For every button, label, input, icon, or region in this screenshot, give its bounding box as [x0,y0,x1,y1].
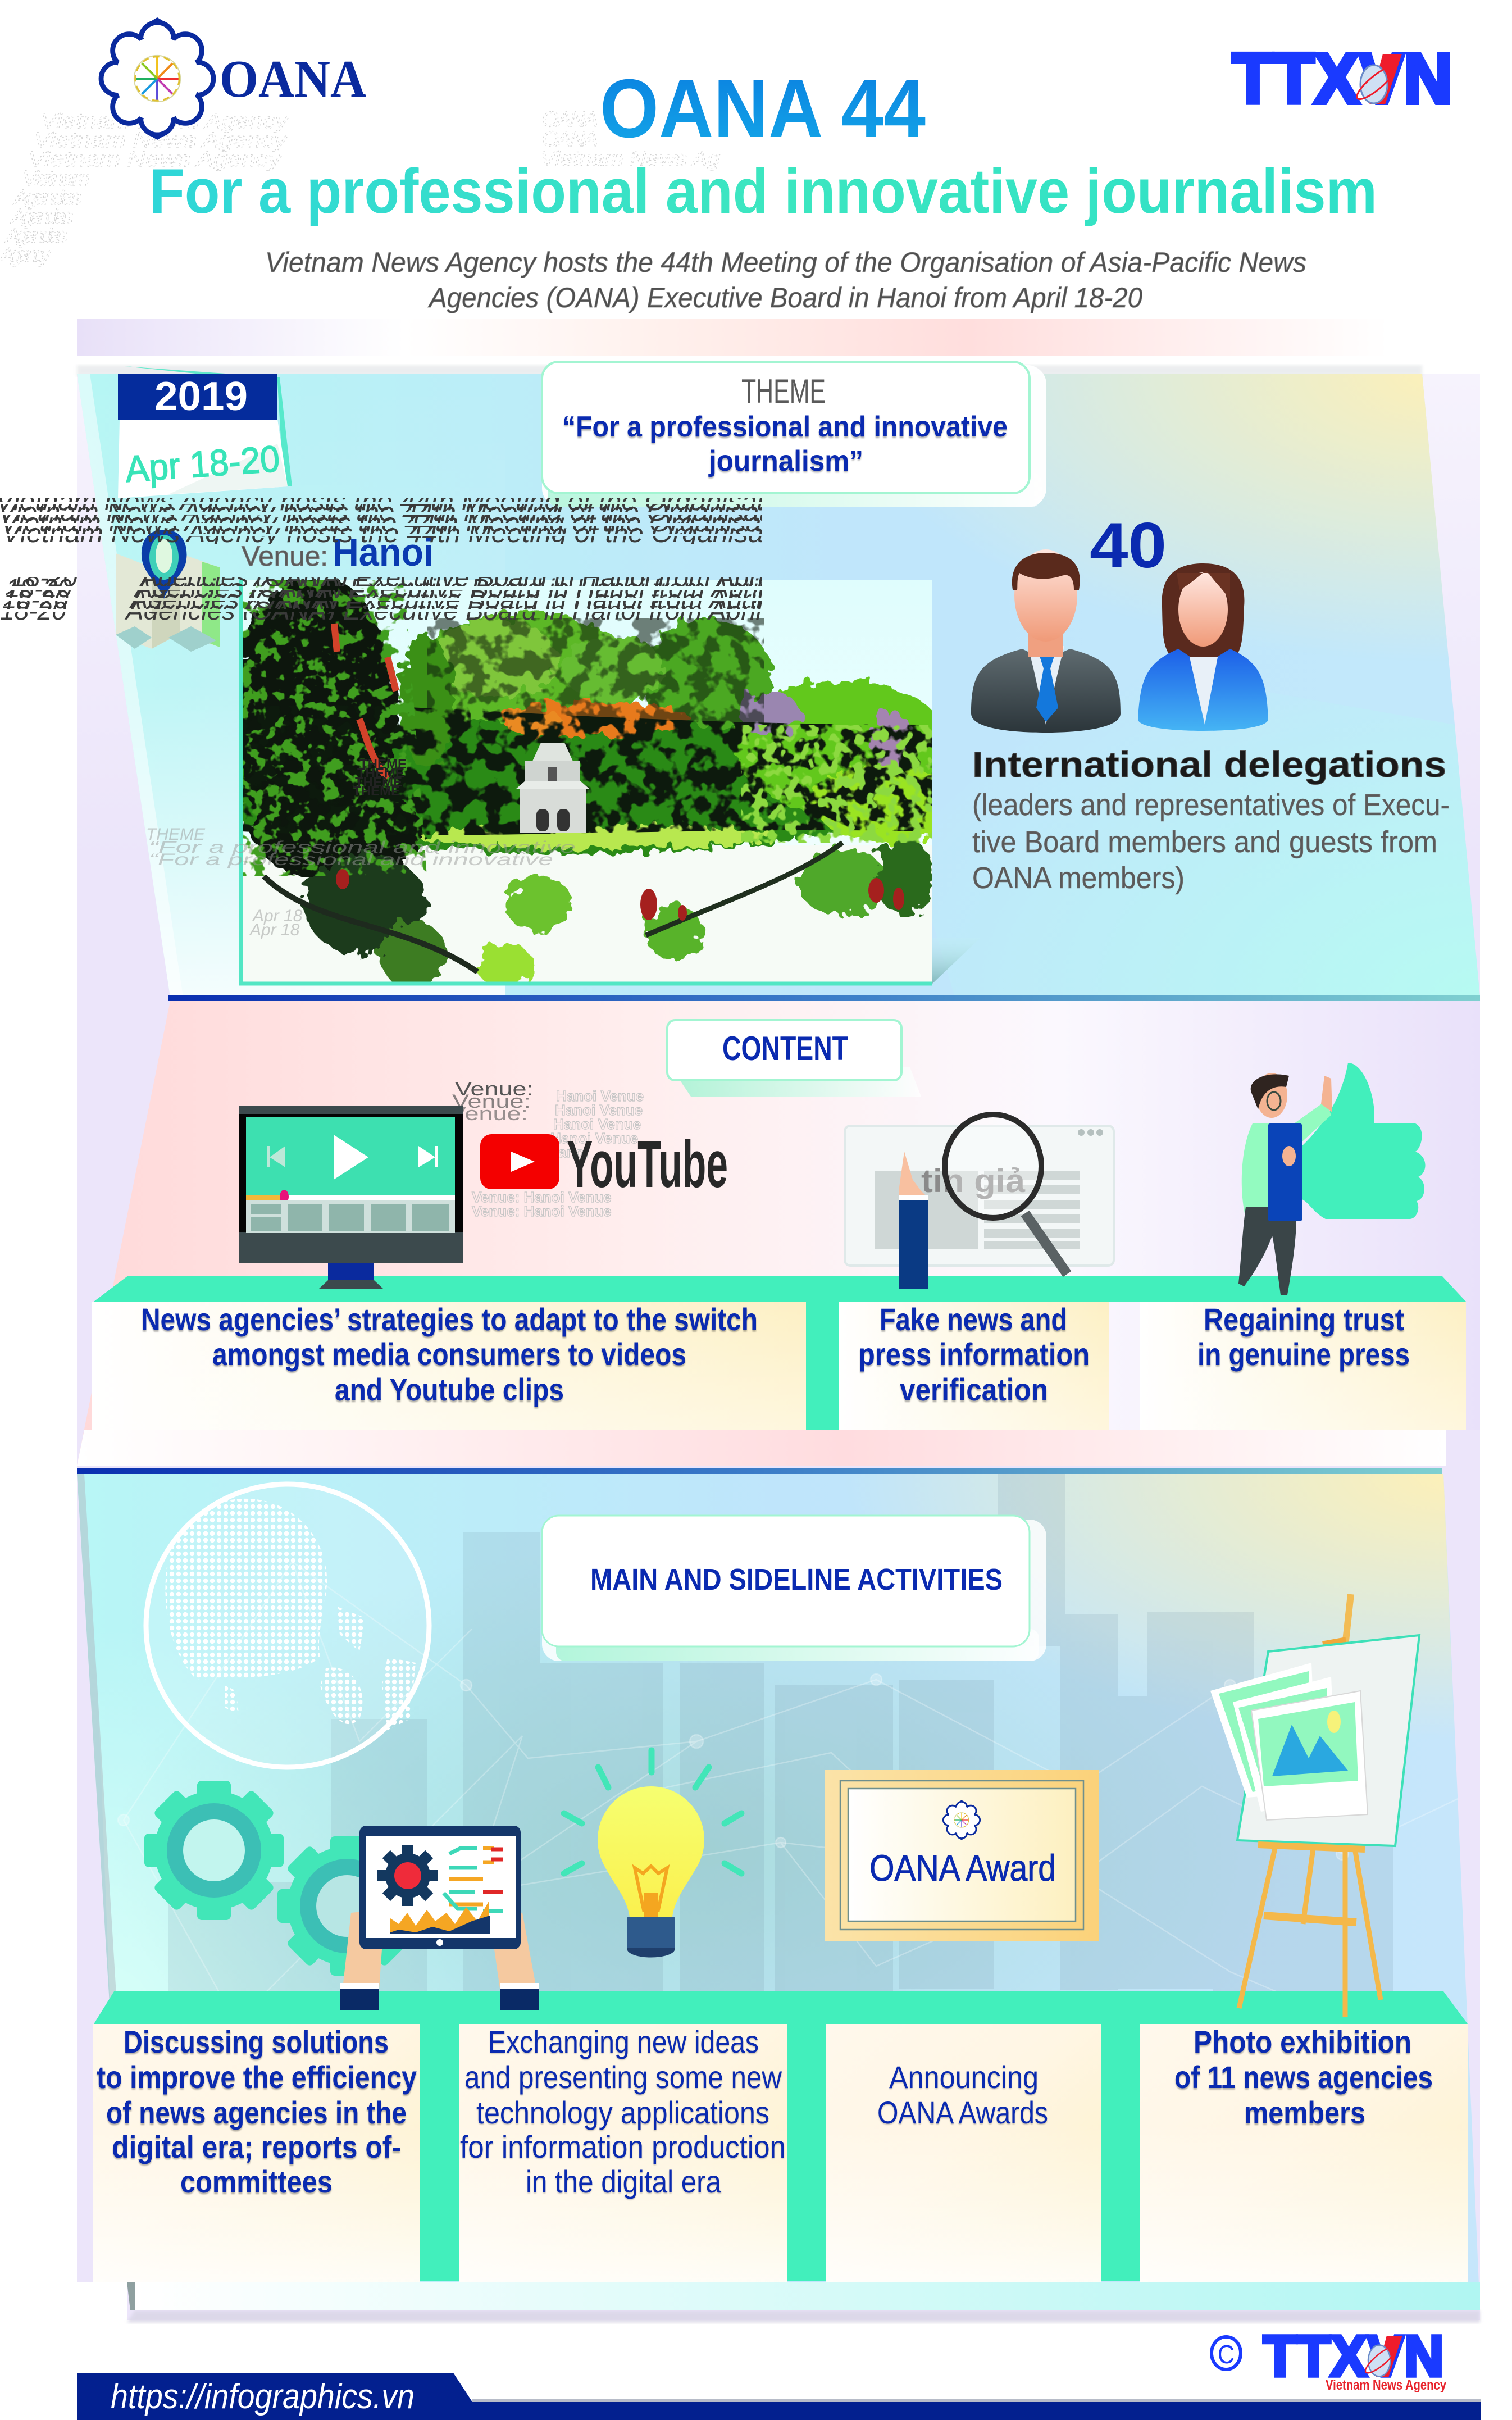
OANA logo [101,20,366,137]
faint ghost text left of header: OANA [542,108,598,131]
icon: map pin [116,530,220,652]
intro text [265,247,1306,313]
card: announcing awards [826,2024,1101,2282]
copyright symbol [1212,2337,1241,2369]
card text: Photo exhibition [1194,2024,1411,2059]
card text: of 11 news agencies [1174,2059,1433,2095]
card text: of news agencies in the [106,2095,407,2130]
content heading: CONTENT [722,1030,848,1067]
ghost text in content panel: Hanoi Venue [550,1130,638,1147]
separator bar 2 [77,1468,1442,1474]
card: photo exhibition [1140,2024,1468,2282]
ghost Venue labels: Venue: [449,1103,528,1125]
calendar [118,366,292,498]
ghost THEME labels on photo: THEME [355,775,402,790]
lavender backing panel [77,374,1480,2320]
photo border [241,580,932,984]
card text: to improve the efficiency [97,2059,417,2095]
faint ghost text left of header: Vietnam News Ag [540,147,720,171]
ghost text overlays: Vietnam News Agency hosts the 44th Meeting of the Organisati [2,518,778,548]
delegations description: OANA members) [972,861,1185,895]
activities platform supports [420,2024,1140,2281]
ghost text overlays: Agencies (OANA) Executive Board in Hanoi from April [129,585,763,614]
ghost text overlays: 18-20 [2,585,69,614]
ghost text below theme [146,825,576,939]
ghost THEME labels on photo: THEME [353,784,400,799]
title: OANA 44: OANA 44 [600,62,926,155]
theme quote [562,411,1008,477]
hands [343,1910,382,1989]
faint ghost text left of header: Vietnam News Agency [40,110,289,133]
ghost text below theme: THEME [146,825,206,844]
card text: in genuine press [1197,1336,1410,1372]
card text: Announcing [889,2059,1039,2095]
icon: easel and photos [1210,1594,1419,2017]
card text: Fake news and [880,1302,1067,1337]
card text: members [1244,2095,1365,2130]
ghost text below theme: “For a professional and innovative [149,850,553,869]
delegations description [972,788,1450,895]
ghost text in content panel: Venue: H [351,1163,413,1180]
ghost text below theme: Apr 18 [252,907,303,925]
YouTube wordmark: YouTube [567,1127,728,1202]
card text: digital era; reports of- [112,2129,401,2164]
card text: News agencies’ strategies to adapt to the switch [141,1302,758,1337]
card text: and presenting some new [464,2059,782,2095]
panel: overview [77,365,1480,997]
intro text: Vietnam News Agency hosts the 44th Meeting of the Organisation of Asia-Pacific News [265,247,1306,278]
photo: Hoan Kiem lake and Turtle Tower [243,580,932,982]
faint ghost text left of header [0,108,720,267]
network lines [118,1562,1460,2022]
OANA logo wordmark: OANA [220,50,366,108]
ghost text overlays: Vietnam News Agency hosts the 44th Meeting of the Organisati [0,497,774,526]
ghost text in content panel: Hanoi Venue [556,1088,644,1104]
card text: Exchanging new ideas [488,2024,759,2059]
award text: OANA Award [869,1847,1056,1889]
activities heading box [542,1516,1046,1661]
card: new ideas [459,2024,787,2282]
card text: Discussing solutions [124,2024,389,2059]
panel: content [77,1001,1480,1466]
city skyline [168,1455,1393,2000]
footer URL: https://infographics.vn [111,2377,415,2416]
decorative band [77,319,1388,356]
ghost text overlays [0,498,762,620]
panel: theme box [542,362,1046,507]
white area behind footer [77,2324,1512,2400]
TTXVN logo bottom [1263,2323,1443,2389]
calendar year: 2019 [154,374,248,419]
ghost Venue labels [449,1079,534,1125]
faint ghost text left of header: OANA [542,128,598,151]
copyright symbol: C [1218,2340,1235,2369]
ghost text overlays: Vietnam News Agency hosts the 44th Meeting of the Organisati [0,508,776,537]
card: regaining trust [1140,1302,1466,1430]
card: fake news [839,1302,1109,1430]
ghost text in content panel: Venue: H [357,1135,419,1152]
ghost text in content panel: Venue: H [359,1121,422,1138]
ghost text below theme: “For a professional and innovative [149,838,576,857]
fold corner under photo [932,938,980,984]
card text [877,2059,1048,2130]
overview panel background [77,374,1480,997]
ghost text overlays: 18-20 [0,596,66,625]
card text: OANA Awards [877,2095,1048,2130]
subtitle: For a professional and innovative journalism [149,156,1377,226]
delegations description: tive Board members and guests from [972,825,1437,859]
ghost text overlays: Agencies (OANA) Executive Board in Hanoi from April [139,563,771,592]
ghost text overlays: 18-20 [11,563,78,592]
Turtle Tower [516,743,590,833]
ghost text overlays: 18-20 [6,574,72,603]
card text: amongst media consumers to videos [212,1336,686,1372]
ghost THEME labels on photo [353,757,407,799]
globe [146,1484,429,1767]
activities platform [94,1991,1468,2024]
separator bar 1 [168,995,1480,1001]
ghost text in content panel [351,1088,644,1220]
icon: OANA award certificate [825,1770,1099,1941]
panel: main and sideline activities [77,1455,1480,2310]
icon: man [971,549,1121,733]
calendar date: Apr 18-20 [124,438,281,490]
ghost text in content panel: Hanoi Venue [555,1102,643,1118]
intro text: Agencies (OANA) Executive Board in Hanoi from April 18-20 [427,282,1142,313]
footer bar [77,2373,1481,2420]
card text: press information [858,1336,1090,1372]
ghost THEME labels on photo: THEME [359,757,407,772]
card text [1174,2024,1433,2130]
card text: Regaining trust [1204,1302,1404,1337]
content platform [94,1276,1466,1302]
ghost text below theme: Apr 18 [249,921,300,939]
icon: video monitor [239,1106,463,1289]
card text [141,1302,758,1407]
ghost text in content panel: Venue: Hanoi Venue [472,1203,612,1220]
card: discussing solutions [93,2024,420,2282]
ghost text in content panel: Venue: Hanoi Venue [472,1189,612,1206]
card text [97,2024,417,2199]
content heading box [667,1020,921,1097]
tablet [359,1826,521,1949]
card text: for information production [460,2129,786,2164]
bottom strip of activities panel [127,2282,1480,2323]
venue label: Venue: [242,540,328,572]
card text: committees [180,2164,333,2199]
card text: verification [900,1372,1048,1407]
TTXVN logo top right [1232,39,1452,118]
magnified text: tin giả [921,1163,1026,1199]
ghost Venue labels: Venue: [452,1091,531,1112]
content platform supports [806,1302,839,1430]
card text: and Youtube clips [335,1372,564,1407]
activities heading: MAIN AND SIDELINE ACTIVITIES [590,1563,1003,1596]
theme quote: “For a professional and innovative [562,411,1008,443]
faint ghost text left of header: Agencies [13,186,81,210]
faint ghost text left of header: Vietnam News Agency [28,148,282,171]
card text [460,2024,786,2199]
YouTube logo [480,1127,728,1202]
faint ghost text left of header: Vietnam [22,167,90,190]
card text: in the digital era [526,2164,722,2199]
ghost Venue labels: Venue: [455,1079,534,1100]
icon: gears and tablet [144,1781,539,2010]
faint ghost text left of header: Vietnam News Agency [34,129,288,152]
ghost text in content panel: Hanoi Venue [553,1116,641,1132]
faint ghost text left of header: Agencies [4,224,67,248]
card text [858,1302,1090,1407]
ghost text overlays: Agencies (OANA) Executive Board in Hanoi from April [124,596,763,625]
ghost text overlays: Agencies (OANA) Executive Board in Hanoi from April [133,574,765,603]
faint ghost text left of header: Agency [0,243,52,267]
venue value: Hanoi [333,530,434,574]
card text: technology applications [476,2095,769,2130]
venue label [242,530,434,574]
icon: light bulb [564,1750,741,1957]
delegations count: 40 [1090,510,1167,581]
icon: woman [1138,563,1268,731]
ghost THEME labels on photo: THEME [357,766,404,781]
theme label: THEME [741,372,826,410]
card: video strategies [92,1302,806,1430]
card text [1197,1302,1410,1372]
theme quote: journalism” [708,445,863,477]
delegations description: (leaders and representatives of Execu- [972,788,1450,822]
icon: person with thumbs up [1238,1063,1426,1295]
icon: fake news magnifier [845,1115,1114,1289]
ghost text in content panel: Hanoi [548,1144,588,1161]
tagline: Vietnam News Agency [1326,2377,1446,2393]
faint ghost text left of header: Agencies [10,205,73,229]
ghost text overlays: Vietnam News Agency hosts the 44th Meeting of the Organisati [0,486,772,516]
delegations heading: International delegations [972,744,1446,785]
ghost text in content panel: Venue: H [354,1149,416,1166]
